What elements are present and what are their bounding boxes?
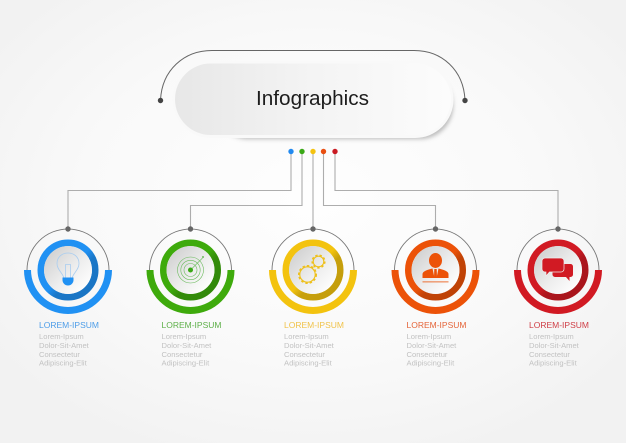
- step 1 text: Dolor-Sit-Amet: [39, 341, 90, 350]
- icon: target: [178, 256, 204, 283]
- step 5 text: Consectetur: [529, 350, 570, 359]
- step 2 text: Consectetur: [162, 350, 203, 359]
- step 2 text: Dolor-Sit-Amet: [162, 341, 212, 350]
- header arc with end dots: [158, 50, 468, 103]
- connector lines: [68, 151, 558, 229]
- step 3 text: LOREM-IPSUM: [284, 320, 344, 330]
- icon: gears: [299, 255, 325, 283]
- step 5 text: Adipiscing-Elit: [529, 358, 578, 368]
- step 5 text: Dolor-Sit-Amet: [529, 341, 580, 350]
- step 4 text: Dolor-Sit-Amet: [406, 341, 457, 350]
- step 3 text: Dolor-Sit-Amet: [284, 341, 335, 350]
- step 2 text: [162, 320, 221, 368]
- step 1: blue: [24, 226, 112, 314]
- step 4 text: [406, 320, 466, 368]
- step 5 text: Lorem-Ipsum: [529, 332, 574, 341]
- step 5: red: [514, 226, 602, 314]
- title pill: [172, 61, 454, 139]
- step 4: orange: [392, 226, 480, 314]
- step 1 text: Lorem-Ipsum: [39, 332, 84, 341]
- step 2: green: [146, 226, 234, 314]
- step 5 text: LOREM-IPSUM: [529, 320, 589, 330]
- step 3: yellow: [269, 226, 357, 314]
- step 4 text: LOREM-IPSUM: [406, 320, 466, 330]
- title text: Infographics: [256, 88, 369, 110]
- step 5 text: [529, 320, 589, 368]
- icon: businessman: [422, 253, 448, 282]
- step 1 text: [39, 320, 99, 368]
- step 4 text: Lorem-Ipsum: [406, 332, 451, 341]
- connector dots: [288, 149, 338, 154]
- step 4 text: Consectetur: [406, 350, 448, 359]
- icon: speech bubbles: [542, 258, 573, 281]
- step 2 text: LOREM-IPSUM: [162, 320, 221, 330]
- step 2 text: Lorem-Ipsum: [162, 332, 206, 341]
- step 4 text: Adipiscing-Elit: [406, 358, 455, 368]
- icon: light bulb: [57, 253, 79, 286]
- step 3 text: [284, 320, 344, 368]
- step 3 text: Consectetur: [284, 350, 325, 359]
- step 1 text: Consectetur: [39, 350, 80, 359]
- step 1 text: LOREM-IPSUM: [39, 320, 99, 330]
- step 2 text: Adipiscing-Elit: [162, 358, 210, 368]
- step 1 text: Adipiscing-Elit: [39, 358, 88, 368]
- step 3 text: Adipiscing-Elit: [284, 358, 333, 368]
- step 3 text: Lorem-Ipsum: [284, 332, 329, 341]
